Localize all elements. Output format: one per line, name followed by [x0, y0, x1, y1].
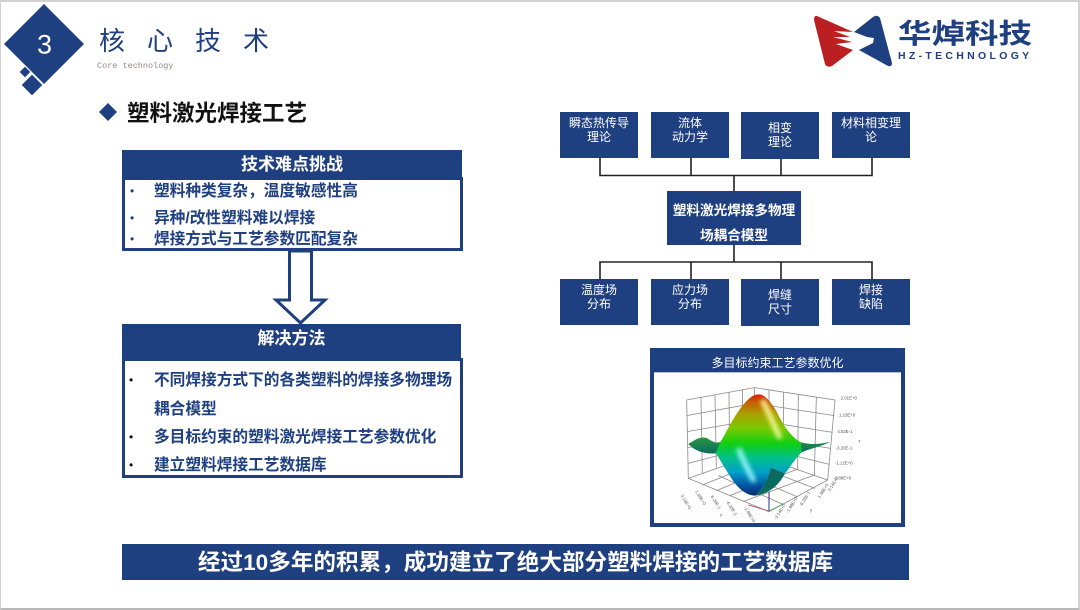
logo: HZ-TECHNOLOGY [898, 50, 1032, 62]
box: multi-physics model [667, 191, 801, 245]
3D surface chart: -6.28E-1 [725, 500, 739, 517]
3D surface chart: -1.89E+0 [833, 476, 852, 481]
arrow: challenges to methods [272, 251, 329, 324]
box: material phase theory [832, 112, 910, 158]
box: temperature field: 分布 [587, 297, 611, 311]
panel: optimisation chart [650, 348, 905, 527]
method item 3: 建立塑料焊接工艺数据库 [154, 457, 327, 474]
method bullet 2: • [129, 430, 133, 444]
bottom banner [122, 544, 909, 580]
panel: methods header: 解决方法 [258, 329, 326, 348]
box: fluid dynamics: 动力学 [672, 130, 708, 144]
box: weld defects: 焊接 [859, 283, 883, 297]
box: temperature field [560, 279, 638, 325]
box: stress field [651, 279, 729, 325]
title: 核心技术 [99, 26, 291, 56]
3D surface chart [654, 372, 901, 524]
box: phase change theory [741, 112, 819, 159]
logo: 华焯科技 [898, 19, 1032, 50]
3D surface chart: y [810, 508, 813, 513]
3D surface chart: -3.20E-1 [836, 445, 853, 450]
3D surface chart: -1.88E+0 [785, 496, 799, 514]
box: transient heat theory: 理论 [587, 130, 611, 144]
3D surface chart: 1.88E+0 [817, 482, 830, 499]
challenges list box [122, 177, 463, 251]
3D surface chart: 3.14E+0 [679, 494, 693, 510]
box: material phase theory: 论 [865, 130, 877, 144]
3D surface chart: -3.14E+0 [773, 502, 787, 521]
challenge item 1: 塑料种类复杂，温度敏感性高 [154, 183, 358, 200]
section number badge: 3 [37, 30, 52, 60]
challenge bullet 2: • [130, 211, 134, 225]
box: stress field: 分布 [678, 297, 702, 311]
method bullet 1: • [129, 373, 133, 387]
methods list box [122, 358, 463, 478]
logo [814, 16, 1032, 67]
box: fluid dynamics: 流体 [678, 116, 702, 130]
challenge item 3: 焊接方式与工艺参数匹配复杂 [154, 231, 358, 248]
box: weld size: 焊缝 [768, 288, 792, 302]
chart title: 多目标约束工艺参数优化 [711, 356, 844, 370]
challenges header: 技术难点挑战 [241, 155, 343, 174]
box: fluid dynamics [651, 112, 729, 158]
box: temperature field: 温度场 [581, 283, 617, 297]
3D surface chart: 2.01E+0 [841, 396, 858, 401]
panel: methods header [122, 324, 461, 359]
subtitle: Core technology [97, 61, 174, 71]
3D surface chart: 1.88E+0 [694, 490, 707, 506]
3D surface chart: -6.28E-1 [798, 490, 812, 507]
challenge bullet 1: • [130, 184, 134, 198]
box: transient heat theory: 瞬态热传导 [569, 116, 629, 130]
box: stress field: 应力场 [672, 283, 708, 297]
bullet heading: 塑料激光焊接工艺 [127, 101, 307, 126]
box: transient heat theory [560, 112, 638, 158]
challenge item 2: 异种/改性塑料难以焊接 [154, 210, 315, 227]
method bullet 3: • [129, 458, 133, 472]
box: weld size [741, 279, 819, 326]
bottom banner: 经过10多年的积累，成功建立了绝大部分塑料焊接的工艺数据库 [198, 550, 833, 575]
3D surface chart: -1.88E+0 [743, 506, 757, 524]
3D surface chart: z [858, 438, 861, 443]
box: phase change theory: 相变 [768, 121, 792, 135]
3D surface chart: 3.14E+0 [827, 475, 840, 492]
method item 1: 不同焊接方式下的各类塑料的焊接多物理场 [154, 372, 452, 389]
challenges header [122, 150, 462, 178]
3D surface chart: x [720, 513, 723, 518]
3D surface chart: 4.52E-1 [837, 429, 853, 434]
section number badge [4, 4, 84, 96]
box: weld size: 尺寸 [768, 302, 792, 316]
3D surface chart: -1.12E+0 [835, 461, 853, 466]
box: weld defects: 缺陷 [859, 297, 883, 311]
method item 1 continued: 耦合模型 [154, 401, 217, 418]
box: phase change theory: 理论 [768, 135, 792, 149]
challenge bullet 3: • [130, 232, 134, 246]
3D surface chart: 1.23E+0 [839, 413, 856, 418]
method item 2: 多目标约束的塑料激光焊接工艺参数优化 [154, 429, 436, 446]
box: multi-physics model: 塑料激光焊接多物理 [673, 203, 795, 218]
box: material phase theory: 材料相变理 [841, 116, 901, 130]
box: multi-physics model: 场耦合模型 [700, 228, 768, 243]
3D surface chart: 6.28E-1 [710, 495, 722, 511]
box: weld defects [832, 279, 910, 325]
